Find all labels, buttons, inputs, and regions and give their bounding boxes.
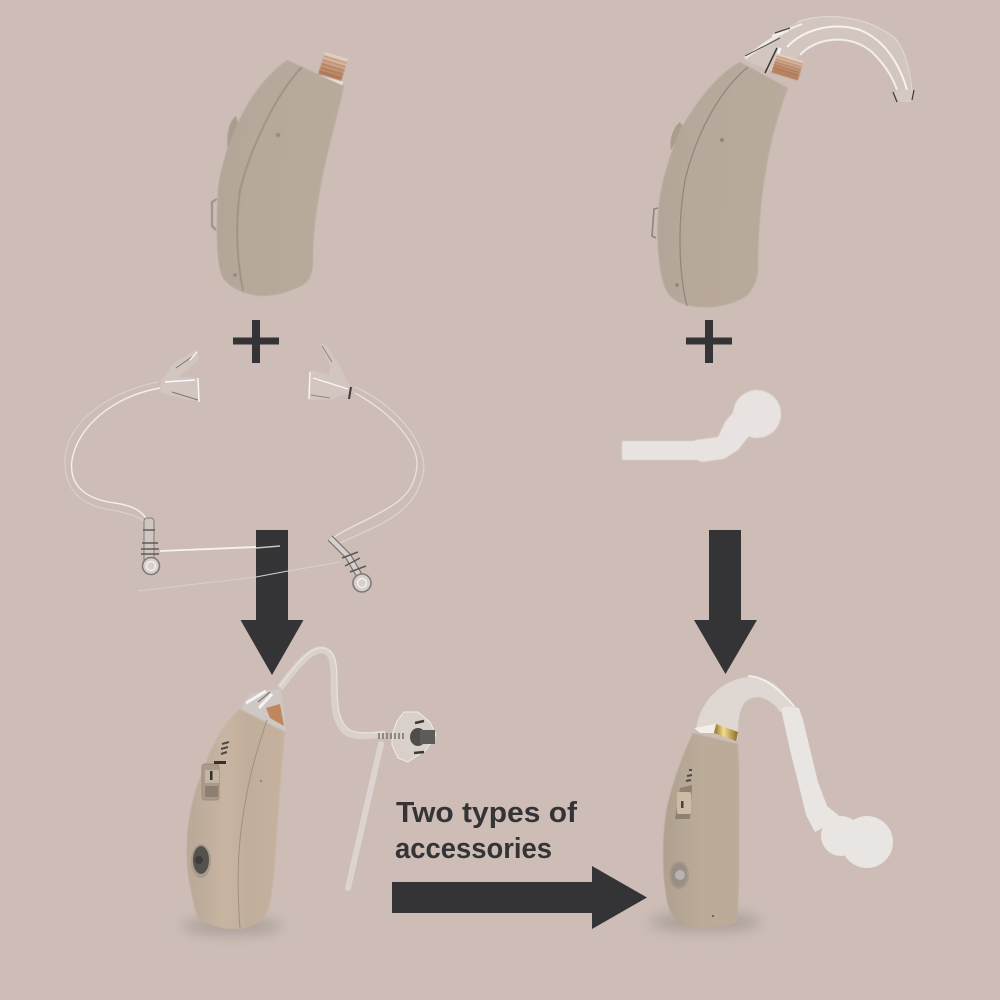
icon: rotary wheel [227, 116, 240, 150]
thin tube accessories pair [65, 344, 424, 592]
white tube [781, 706, 842, 832]
hook highlight [748, 676, 794, 706]
icon: battery door clip [652, 208, 658, 238]
text: two types of accessories: accessories [395, 833, 552, 865]
device shell [217, 60, 344, 296]
seam line [238, 720, 267, 928]
right tube connector [330, 538, 362, 580]
arrow: down right [694, 530, 757, 674]
plus sign right [686, 320, 732, 363]
icon: microphone hole [276, 133, 280, 137]
text: two types of accessories: Two types of [396, 797, 577, 829]
icon: metal tip [378, 733, 405, 739]
ribbed bend [692, 410, 752, 462]
icon: indicator dashes [221, 742, 229, 754]
icon: copper thread connector [316, 52, 350, 86]
left thin tube [65, 349, 280, 574]
retaining line [348, 744, 381, 888]
icon: rotary wheel [670, 122, 684, 150]
device shell [187, 709, 285, 929]
hearing aid: top left body with copper thread [212, 52, 350, 296]
icon: lower hole [233, 273, 237, 277]
thin tube [280, 648, 385, 888]
left dome [160, 349, 200, 402]
icon: program switch [202, 761, 226, 800]
icon: mic dot [260, 780, 262, 782]
plus sign left [233, 320, 279, 363]
icon: volume dial [670, 862, 688, 888]
icon: metal collar [240, 689, 286, 732]
device shell [663, 733, 739, 928]
right thin tube [308, 344, 424, 592]
text: two types of accessories [395, 797, 577, 865]
icon: dome tip [392, 712, 436, 762]
icon: volume dial [191, 844, 211, 878]
icon: clear ear hook [745, 17, 914, 102]
hearing aid: top right with clear hook [652, 17, 914, 307]
tube stub [622, 441, 700, 460]
right dome [308, 344, 353, 400]
ball tip [821, 816, 893, 868]
icon: program switch [675, 785, 692, 819]
icon: copper thread connector [771, 53, 804, 80]
floor shadow [649, 913, 761, 931]
icon: dial glyph [675, 870, 685, 880]
ball tip [733, 390, 781, 438]
arrow: down left [240, 530, 304, 675]
icon: lower hole [675, 283, 679, 287]
floor shadow [182, 918, 282, 934]
icon: battery door clip [212, 199, 217, 230]
clear ear hook [696, 677, 797, 738]
device shell [657, 62, 788, 307]
left retaining line [160, 546, 280, 551]
arrow: horizontal [392, 866, 647, 929]
seam line [237, 67, 302, 291]
left and right retaining lines over arrow [138, 546, 340, 591]
icon: indicator dashes [686, 770, 692, 781]
icon: gold ring [714, 724, 738, 741]
assembled hearing aid: left [182, 648, 436, 934]
seam line [680, 67, 748, 306]
icon: microphone hole [720, 138, 724, 142]
icon: bottom hole [712, 915, 714, 917]
earmold accessory [622, 390, 781, 462]
assembled hearing aid: right [649, 676, 893, 931]
left tube connector [144, 518, 154, 563]
